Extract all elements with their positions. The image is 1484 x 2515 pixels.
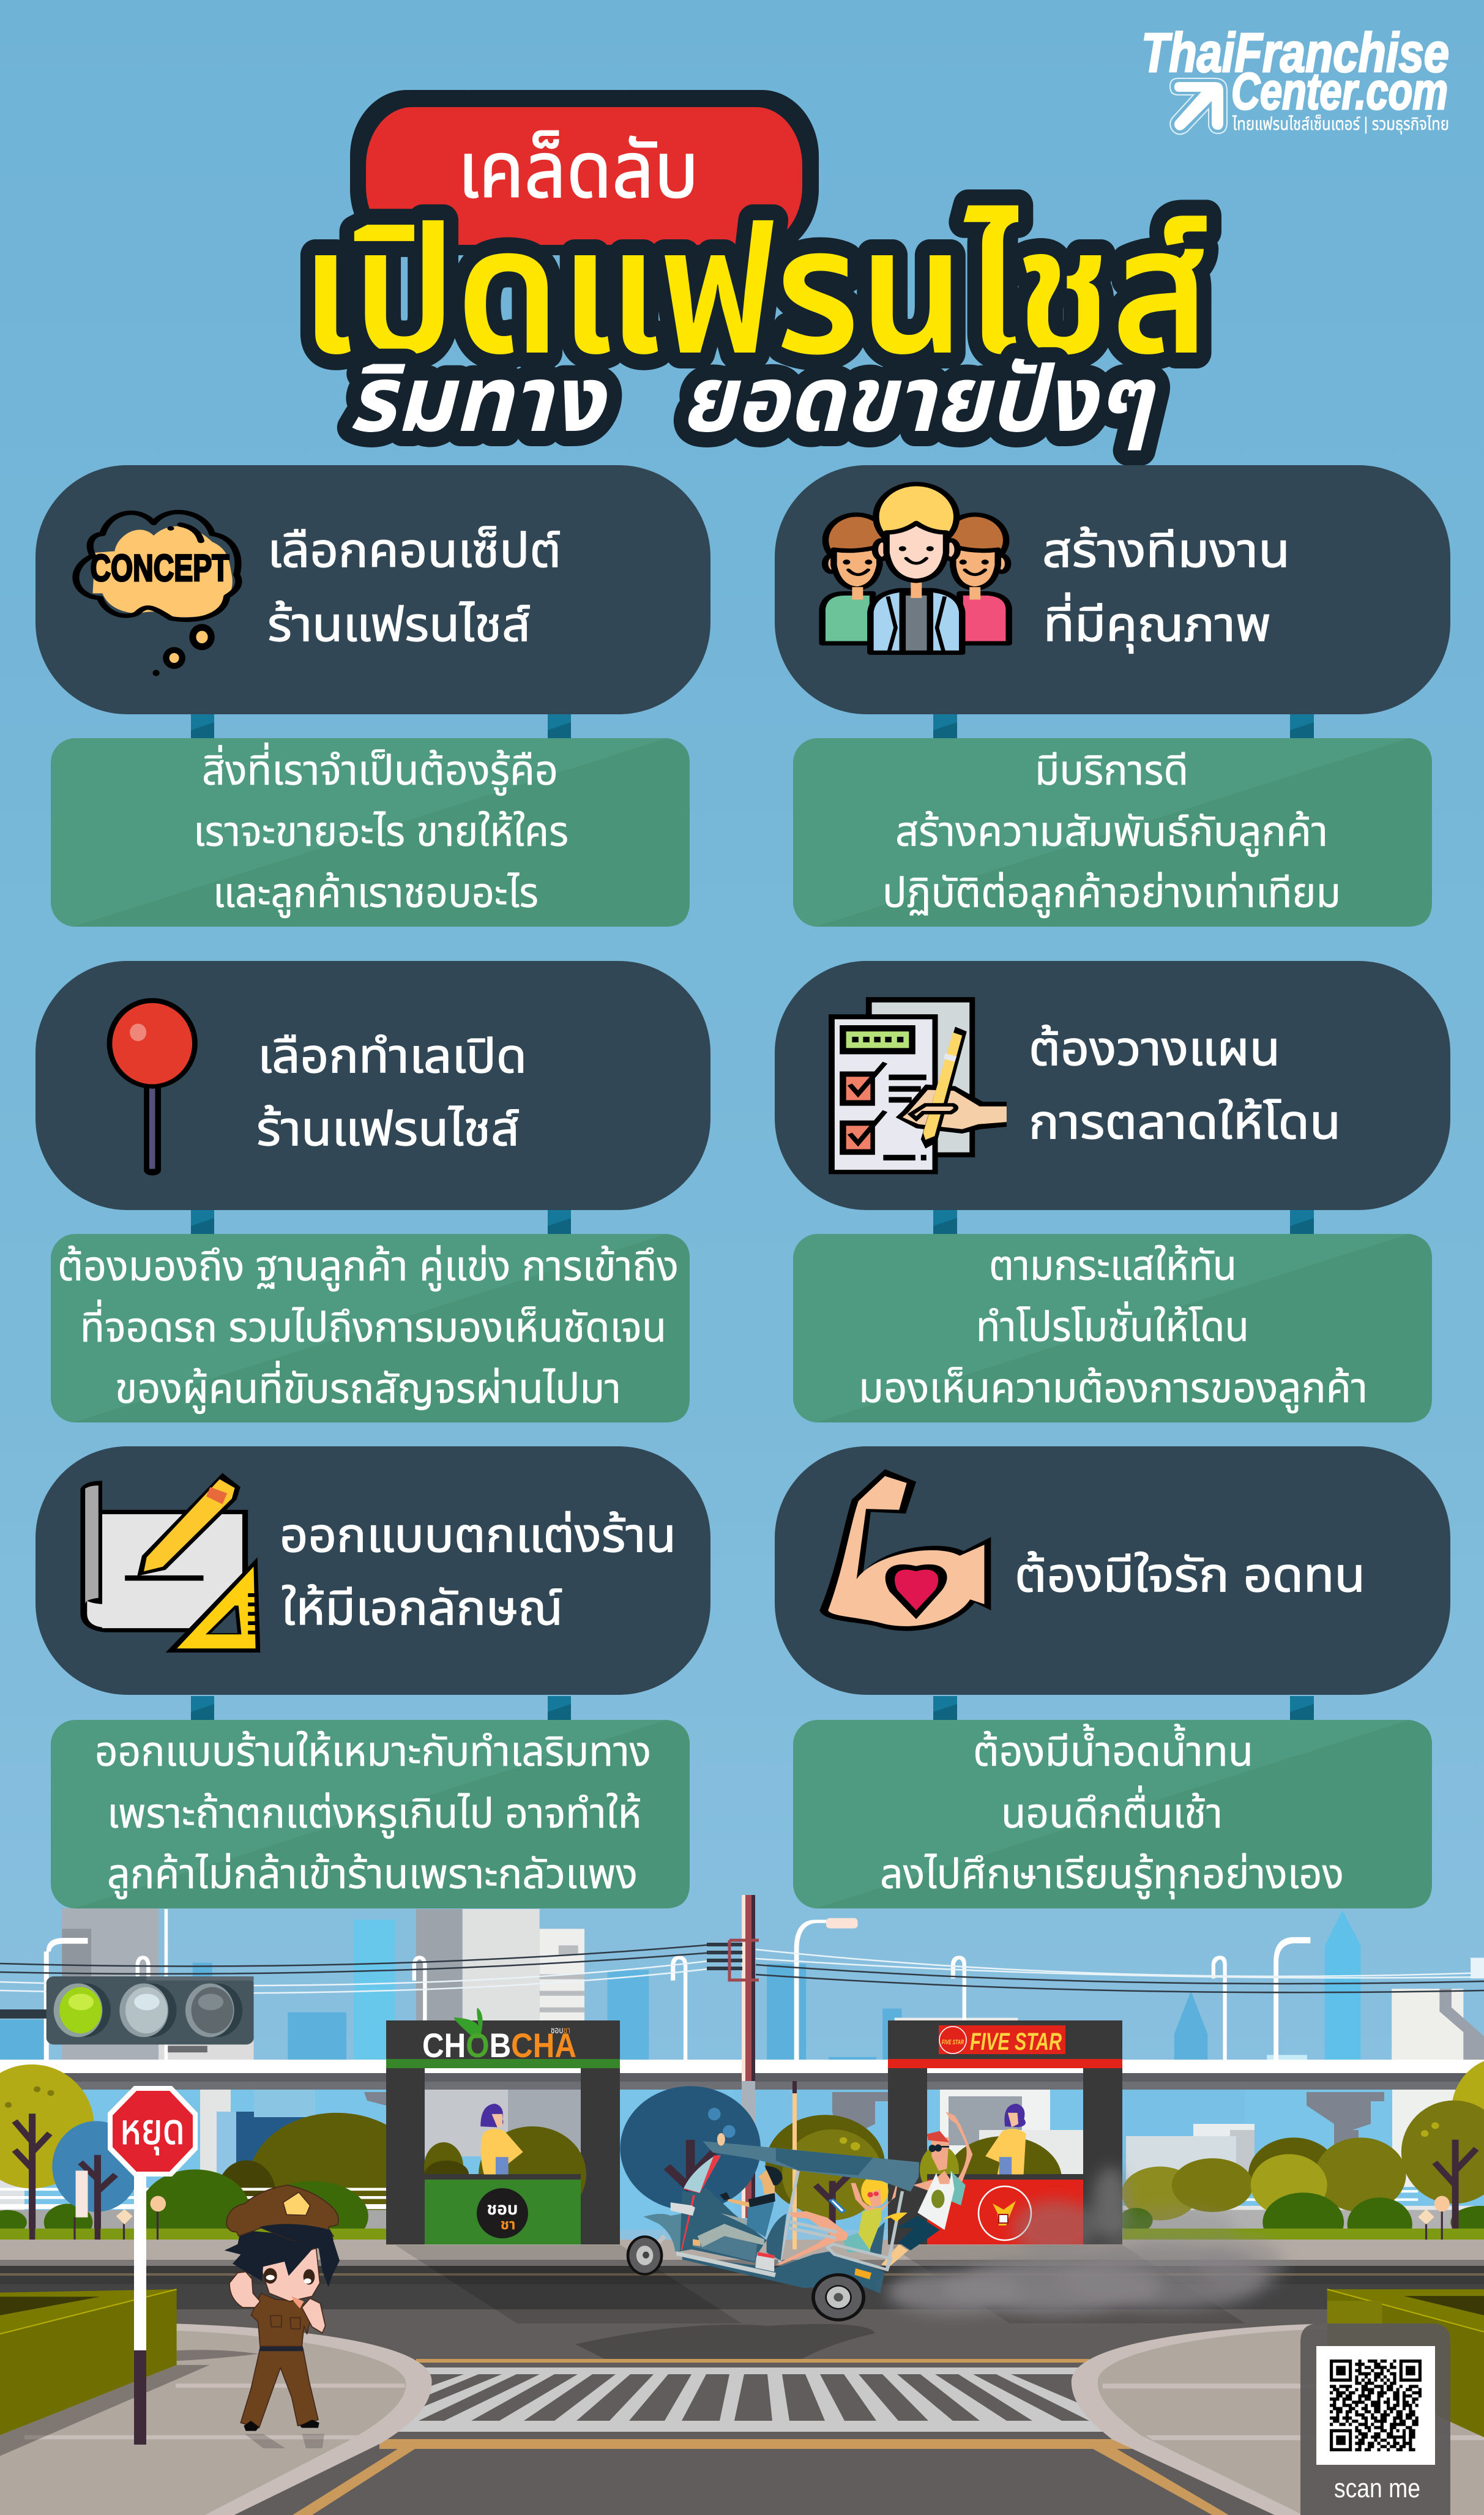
blue tree behind tuk-tuk (620, 2086, 761, 2211)
left corner sidewalk (0, 2289, 432, 2515)
crosswalk (293, 2359, 1229, 2515)
panel: design detail (51, 1720, 690, 1908)
detail text: ปฏิบัติต่อลูกค้าอย่างเท่าเทียม (882, 870, 1341, 918)
detail text: ลงไปศึกษาเรียนรู้ทุกอย่างเอง (880, 1851, 1344, 1899)
stop sign: หยุด (120, 2106, 185, 2155)
panel: location (35, 961, 710, 1210)
title block (300, 90, 1209, 450)
road layers (0, 2240, 1484, 2515)
heading: เลือกทำเลเปิด (258, 1029, 527, 1083)
raised hand (229, 2272, 260, 2308)
heading line 2: ที่มีคุณภาพ (1043, 592, 1271, 654)
belt (259, 2346, 303, 2351)
city skyline right (767, 1910, 1484, 2092)
shoes (244, 2420, 319, 2431)
shirt (251, 2293, 312, 2346)
heading: เลือกคอนเซ็ปต์ (267, 523, 561, 577)
shadow (245, 2434, 324, 2448)
QR pattern (1330, 2361, 1422, 2450)
right corner sidewalk (1072, 2289, 1484, 2515)
QR code card (1300, 2323, 1450, 2515)
panel: team detail (793, 738, 1432, 927)
heading: ต้องวางแผน (1029, 1022, 1280, 1075)
heading: ออกแบบตกแต่งร้าน (280, 1508, 676, 1562)
icon: team of three (822, 484, 1009, 652)
panel: concept (35, 465, 710, 714)
Five Star booth (888, 2020, 1122, 2244)
trees and bushes right (766, 2057, 1484, 2259)
front wheel (627, 2235, 665, 2276)
heading: ต้องมีใจรัก อดทน (1015, 1548, 1365, 1602)
eyes (264, 2268, 277, 2284)
right person (944, 515, 1009, 643)
detail text: และลูกค้าเราชอบอะไร (213, 870, 539, 918)
detail text (193, 742, 569, 918)
vendor woman (985, 2104, 1026, 2174)
icon: map pin (107, 998, 198, 1175)
detail text: เพราะถ้าตกแต่งหรูเกินไป อาจทำให้ (107, 1790, 641, 1839)
exhaust smoke (887, 2167, 1285, 2314)
title line 2: เปิดแฟรนไชส์ (300, 192, 1209, 391)
middle person (870, 484, 962, 652)
fist (302, 2298, 326, 2333)
rear seat (767, 2214, 786, 2260)
elevated expressway (0, 2060, 1484, 2210)
heading line 2: ร้านแฟรนไชส์ (256, 1102, 520, 1156)
panel: team (775, 465, 1450, 714)
title line 3 (348, 348, 1156, 450)
panel: concept detail (51, 738, 690, 927)
icon: concept thought cloud (76, 512, 239, 676)
traffic light (0, 1976, 254, 2044)
detail text: นอนดึกตื่นเช้า (1001, 1785, 1223, 1837)
detail text: มีบริการดี (1035, 747, 1188, 794)
floor trim (676, 2251, 776, 2278)
icon: logo arrow (1170, 78, 1227, 134)
detail text (95, 1728, 651, 1899)
side bars (789, 2222, 837, 2238)
detail text (859, 1243, 1368, 1413)
detail text: เราจะขายอะไร ขายให้ใคร (193, 809, 569, 855)
detail text: ทำโปรโมชั่นให้โดน (976, 1301, 1249, 1350)
vendor woman (480, 2104, 523, 2174)
connector posts (191, 714, 1314, 1720)
trees and bushes left (0, 2065, 425, 2259)
logo (1141, 23, 1449, 134)
detail text: ต้องมองถึง ฐานลูกค้า คู่แข่ง การเข้าถึง (58, 1243, 679, 1291)
detail text: มองเห็นความต้องการของลูกค้า (859, 1365, 1368, 1413)
title line 3: ยอดขายปังๆ (680, 348, 1156, 450)
rear body (682, 2251, 885, 2293)
detail text: สิ่งที่เราจำเป็นต้องรู้คือ (202, 742, 558, 796)
headlight (671, 2202, 695, 2216)
brand round logo: ชา (501, 2216, 515, 2233)
detail text (880, 1724, 1344, 1899)
power lines (0, 1945, 1484, 1993)
roof (703, 2133, 919, 2192)
left person (822, 515, 888, 643)
front fender (644, 2214, 682, 2252)
panel: passion detail (793, 1720, 1432, 1908)
driver (693, 2166, 783, 2248)
panel: passion (775, 1446, 1450, 1695)
Chobcha booth (386, 2008, 620, 2244)
under-bridge buildings (0, 2089, 1484, 2242)
title line 3: ริมทาง (348, 348, 607, 450)
city skyline left (0, 1908, 687, 2062)
title line 1: เคล็ดลับ (458, 127, 699, 214)
brand name: CHOBCHA (422, 2026, 576, 2065)
title ribbon (350, 90, 819, 255)
brand round logo: ชอบ (487, 2199, 518, 2218)
panel: marketing (775, 961, 1450, 1210)
icon: checklist and hand (829, 997, 1007, 1174)
detail text (882, 747, 1341, 918)
panel: marketing detail (793, 1234, 1432, 1422)
lamp post (792, 2081, 797, 2249)
brand sign: FIVE STAR (970, 2028, 1062, 2055)
license plate (854, 2268, 871, 2279)
detail text: ลูกค้าไม่กล้าเข้าร้านเพราะกลัวแพง (107, 1851, 638, 1899)
brand thai tag: ชอบชา (551, 2025, 570, 2036)
heading line 2: ให้มีเอกลักษณ์ (282, 1581, 563, 1635)
stop sign (108, 2086, 198, 2445)
brand sign (939, 2025, 1065, 2055)
face (259, 2248, 320, 2301)
woman (776, 2171, 908, 2265)
detail text: ของผู้คนที่ขับรถสัญจรผ่านไปมา (115, 1361, 621, 1414)
scan me label: scan me (1334, 2473, 1420, 2503)
tuk-tuk with passengers (627, 2112, 972, 2322)
icon: muscle arm with heart (819, 1469, 991, 1631)
brand round logo (477, 2188, 528, 2238)
roof posts (780, 2171, 903, 2269)
trousers (240, 2349, 318, 2428)
police officer (225, 2185, 340, 2448)
detail text: ตามกระแสให้ทัน (989, 1243, 1237, 1289)
heading line 2: ร้านแฟรนไชส์ (267, 597, 531, 651)
man jumping behind (881, 2112, 972, 2266)
icon: concept thought cloud: CONCEPT (90, 547, 229, 589)
heading line 2: การตลาดให้โดน (1029, 1095, 1341, 1149)
detail text: สร้างความสัมพันธ์กับลูกค้า (895, 809, 1328, 857)
hair (225, 2230, 340, 2287)
detail text: ออกแบบร้านให้เหมาะกับทำเลริมทาง (95, 1728, 651, 1775)
cab (680, 2187, 767, 2263)
brand leaf (454, 2008, 483, 2038)
detail text (58, 1243, 679, 1414)
heading: สร้างทีมงาน (1042, 523, 1290, 577)
brand sign: FIVE STAR (942, 2039, 964, 2046)
detail text: ต้องมีน้ำอดน้ำทน (973, 1724, 1253, 1775)
street scene (0, 1895, 1484, 2515)
panel: design (35, 1446, 710, 1695)
panel: location detail (51, 1234, 690, 1422)
detail text: ที่จอดรถ รวมไปถึงการมองเห็นชัดเจน (80, 1299, 666, 1351)
round logo (979, 2186, 1031, 2240)
rear wheel (811, 2273, 865, 2322)
utility pole (707, 1895, 759, 2218)
icon: design plan with pencil and set square (80, 1473, 260, 1653)
windshield (684, 2156, 721, 2193)
cap (226, 2185, 338, 2242)
